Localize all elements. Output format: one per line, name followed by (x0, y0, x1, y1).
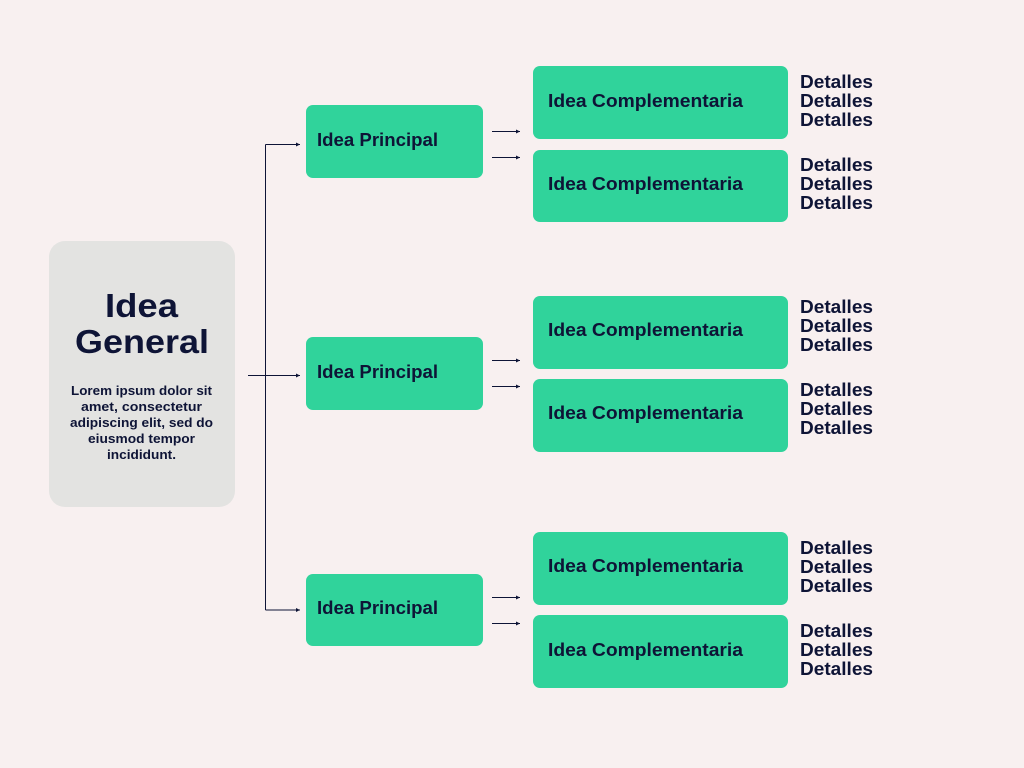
branch: group 3 (306, 532, 873, 688)
box: idea complementaria 2b: Idea Complementaria (548, 403, 744, 423)
branch: group 1 (306, 66, 873, 222)
box: idea complementaria 3a: Idea Complementaria (548, 556, 744, 576)
text block: description (70, 383, 213, 462)
arrows: group 2 (492, 360, 520, 386)
text block: detalles 2a: Detalles (800, 335, 873, 355)
panel: idea general (49, 241, 235, 507)
text block: description: amet, consectetur (81, 399, 202, 414)
text block: detalles 2b: Detalles (800, 418, 873, 438)
box: idea complementaria 1a (533, 66, 788, 139)
text block: detalles 1b: Detalles (800, 174, 873, 194)
box: idea complementaria 3b (533, 615, 788, 688)
text block: detalles 3b: Detalles (800, 659, 873, 679)
text block: detalles 3b (800, 621, 873, 679)
text block: detalles 3a (800, 538, 873, 596)
text block: detalles 1a: Detalles (800, 72, 873, 92)
text block: detalles 3b: Detalles (800, 621, 873, 641)
text block: detalles 1a (800, 72, 873, 130)
text block: detalles 2a: Detalles (800, 316, 873, 336)
heading: idea general (75, 287, 209, 360)
branch: group 2 (306, 296, 873, 452)
box: idea complementaria 2b (533, 379, 788, 452)
box: idea complementaria 1a: Idea Complementaria (548, 91, 744, 111)
text block: description: adipiscing elit, sed do (70, 415, 213, 430)
text block: description: eiusmod tempor (88, 431, 195, 446)
text block: detalles 2b (800, 380, 873, 438)
box: idea principal 2: Idea Principal (317, 362, 438, 382)
box: idea principal 3: Idea Principal (317, 598, 438, 618)
box: idea principal 3 (306, 574, 483, 646)
box: idea complementaria 2a: Idea Complementaria (548, 320, 744, 340)
text block: detalles 2b: Detalles (800, 399, 873, 419)
text block: detalles 3a: Detalles (800, 557, 873, 577)
text block: detalles 1a: Detalles (800, 110, 873, 130)
box: idea complementaria 3a (533, 532, 788, 605)
box: idea complementaria 1b: Idea Complementaria (548, 174, 744, 194)
text block: detalles 2a (800, 297, 873, 355)
text block: detalles 3b: Detalles (800, 640, 873, 660)
text block: detalles 2a: Detalles (800, 297, 873, 317)
text block: detalles 3a: Detalles (800, 538, 873, 558)
text block: detalles 3a: Detalles (800, 576, 873, 596)
arrows: group 3 (492, 598, 520, 624)
text block: description: incididunt. (107, 447, 176, 462)
arrows: group 1 (492, 132, 520, 158)
box: idea complementaria 1b (533, 150, 788, 222)
text block: detalles 1a: Detalles (800, 91, 873, 111)
box: idea principal 1 (306, 105, 483, 178)
heading: idea general: Idea (105, 287, 179, 324)
box: idea complementaria 2a (533, 296, 788, 369)
box: idea complementaria 3b: Idea Complementaria (548, 640, 744, 660)
box: idea principal 2 (306, 337, 483, 410)
text block: detalles 1b (800, 155, 873, 213)
text block: detalles 2b: Detalles (800, 380, 873, 400)
arrows: main connector tree (248, 144, 300, 610)
text block: description: Lorem ipsum dolor sit (71, 383, 213, 398)
box: idea principal 1: Idea Principal (317, 130, 438, 150)
text block: detalles 1b: Detalles (800, 155, 873, 175)
heading: idea general: General (75, 323, 209, 360)
text block: detalles 1b: Detalles (800, 193, 873, 213)
